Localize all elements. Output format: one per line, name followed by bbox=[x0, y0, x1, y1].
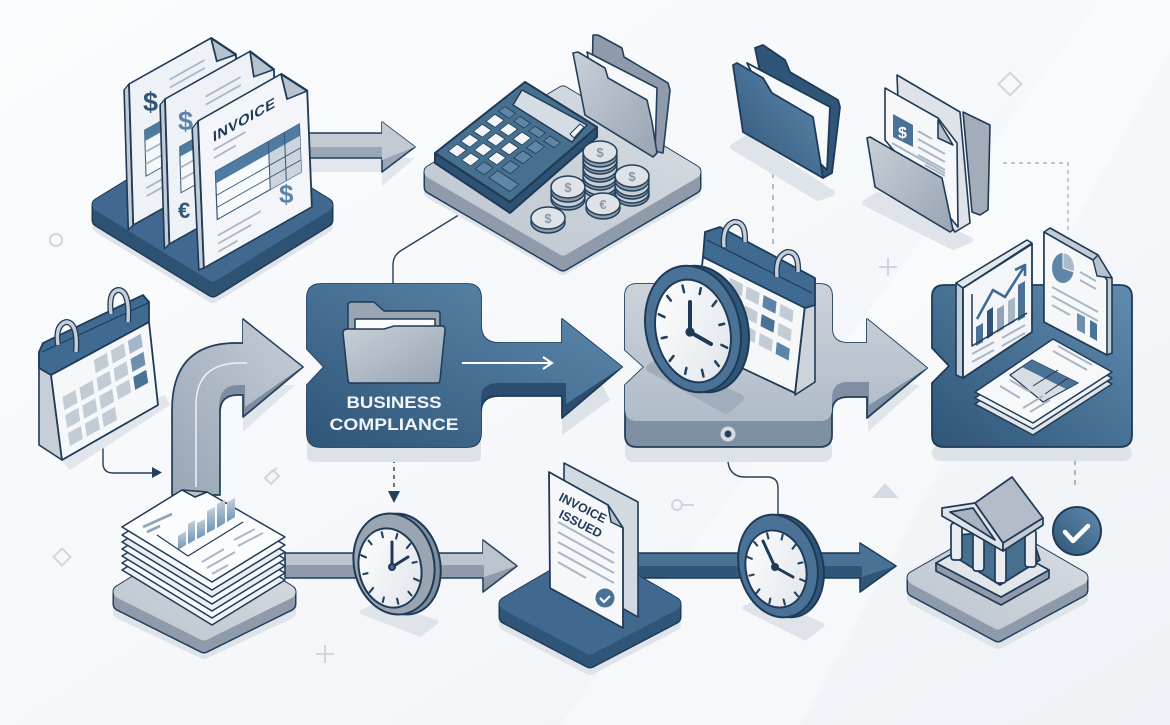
panel: clock and calendar platform bbox=[625, 284, 927, 462]
large clock bbox=[633, 256, 761, 402]
heading: BUSINESS bbox=[346, 393, 442, 412]
platform body with arrow bbox=[625, 284, 927, 447]
line chart sheet bbox=[956, 240, 1032, 378]
coin stacks: $ bbox=[564, 180, 572, 195]
middle invoice with dollar and euro: $ bbox=[178, 106, 193, 136]
coin stacks: $ bbox=[544, 211, 552, 226]
small clock bbox=[344, 505, 450, 623]
panel: business compliance: COMPLIANCE bbox=[330, 415, 458, 434]
curved arrow up to compliance bbox=[172, 319, 303, 495]
platform shadow bbox=[625, 440, 832, 462]
back invoice with dollar bbox=[124, 25, 239, 230]
decorative background marks bbox=[50, 73, 1021, 663]
paper stack platform bbox=[120, 540, 289, 652]
platform: bank bbox=[914, 530, 1081, 642]
middle invoice with dollar and euro: € bbox=[178, 198, 190, 223]
coin stacks: $ bbox=[628, 169, 636, 184]
dollar mark on front invoice: $ bbox=[279, 179, 294, 209]
arrow shadow bbox=[481, 380, 610, 435]
table sheet stack bbox=[975, 339, 1112, 435]
clock shadow bbox=[650, 362, 740, 410]
panel face bbox=[307, 284, 622, 447]
blue arrow with clock bbox=[630, 506, 896, 638]
connector dot bbox=[720, 426, 736, 442]
coin stacks: € bbox=[599, 197, 607, 212]
middle invoice with dollar and euro bbox=[160, 39, 277, 249]
document title: INVOICE bbox=[557, 490, 609, 526]
calendar on platform bbox=[693, 222, 815, 395]
back invoice with dollar: $ bbox=[143, 87, 158, 117]
verified check badge bbox=[1053, 507, 1101, 555]
panel body bbox=[932, 285, 1132, 447]
folder with dollar documents bbox=[865, 75, 990, 247]
document title: ISSUED bbox=[557, 507, 604, 541]
panel with arrow bbox=[307, 284, 622, 447]
bank icon bbox=[936, 477, 1049, 605]
invoice issued document bbox=[549, 463, 638, 628]
clock shadow bbox=[362, 605, 436, 634]
panel shadow bbox=[307, 440, 481, 462]
coin stacks bbox=[531, 141, 649, 233]
blue folder bbox=[733, 45, 840, 198]
clock shadow bbox=[745, 600, 822, 638]
platform: invoices bbox=[99, 135, 326, 296]
folder on calculator platform bbox=[573, 35, 670, 157]
front invoice bbox=[192, 60, 312, 271]
blue clock bbox=[728, 506, 834, 626]
invoice document stack bbox=[124, 25, 312, 271]
folder icon bbox=[343, 302, 445, 383]
platform face bbox=[625, 284, 927, 421]
connector lines bbox=[103, 162, 1075, 514]
arrow with small clock bbox=[285, 505, 517, 634]
front invoice: INVOICE bbox=[213, 95, 276, 146]
calculator bbox=[435, 82, 597, 213]
paper stack bbox=[122, 490, 285, 625]
panel: business compliance bbox=[307, 284, 622, 462]
check badge bbox=[596, 588, 614, 608]
platform: invoice issued bbox=[506, 555, 674, 668]
calendar: left bbox=[39, 290, 170, 470]
arrow: invoices to calculator bbox=[300, 122, 415, 186]
coin stacks: $ bbox=[596, 145, 604, 160]
report chart on top sheet bbox=[178, 498, 235, 550]
folder with dollar documents: $ bbox=[898, 125, 907, 142]
white flow arrow bbox=[462, 357, 552, 369]
panel: reports bbox=[932, 228, 1132, 461]
platform: calculator and coins bbox=[431, 93, 694, 268]
pie chart sheet bbox=[1044, 228, 1112, 355]
panel shadow bbox=[932, 445, 1132, 461]
arrow shadow bbox=[832, 380, 920, 432]
